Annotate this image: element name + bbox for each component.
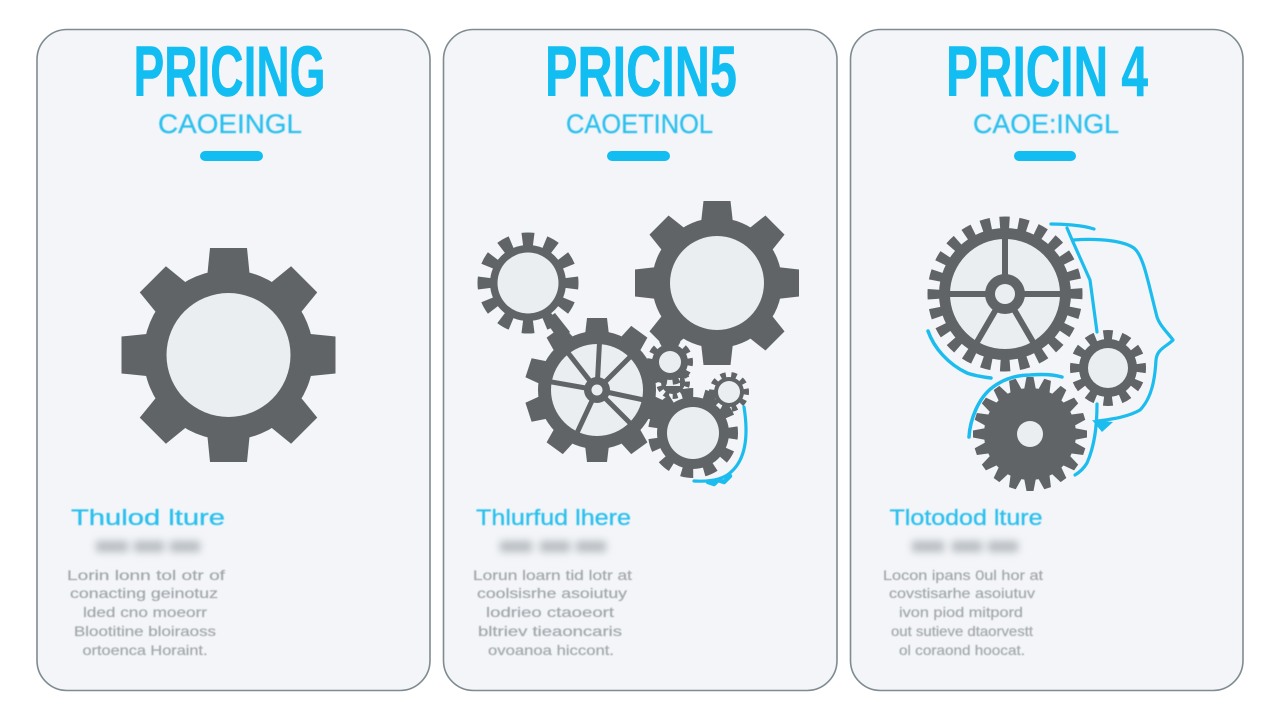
panel 2 body text: coolsisrhe asoiutuy: [477, 585, 627, 601]
panel 1 body text: ortoenca Horaint.: [82, 642, 208, 658]
panel 2 blurred sub-label: [500, 541, 606, 552]
panel: pricing column 1: [37, 30, 430, 690]
panel 3 title: PRICIN 4: [946, 33, 1148, 112]
panel 1 accent bar: [200, 151, 263, 161]
panel 3 body text: [883, 567, 1043, 658]
panel 3 heading: Tlotodod lture: [890, 505, 1042, 530]
large gear top right: [635, 201, 799, 365]
panel 1 heading: Thulod lture: [71, 505, 225, 530]
panel 3 blurred sub-label: [912, 541, 1018, 552]
panel 1 title: PRICING: [134, 33, 326, 112]
panel 2 body text: ovoanoa hiccont.: [488, 642, 614, 658]
small gear right: [1075, 335, 1141, 401]
panel 3 body text: Locon ipans 0ul hor at: [883, 567, 1043, 583]
panel 2 title: PRICIN5: [545, 33, 737, 112]
panel 3 body text: out sutieve dtaorvestt: [891, 623, 1033, 639]
panel 1 body text: Lorin lonn tol otr of: [67, 567, 225, 583]
panel 1 subtitle: CAOEINGL: [158, 109, 302, 139]
panel 1 body text: conacting geinotuz: [70, 585, 218, 601]
solid gear bottom: [973, 377, 1087, 491]
panel 1 card: [37, 30, 430, 690]
panel 3 body text: ol coraond hoocat.: [899, 642, 1025, 658]
panel 1 body text: Blootitine bloiraoss: [74, 623, 216, 639]
icon: single large gear: [122, 248, 336, 462]
panel 1 body text: lded cno moeorr: [83, 604, 207, 620]
panel 1 blurred sub-label: [96, 541, 200, 552]
panel 3 accent bar: [1014, 151, 1076, 161]
icon: cluster of gears: [484, 201, 799, 484]
blue curve accent: [694, 407, 746, 481]
blue curve blob: [708, 476, 730, 484]
lower gear: [653, 393, 733, 473]
panel 2 body text: [473, 567, 632, 658]
panel 3 card: [850, 30, 1243, 690]
panel 1 body text: [67, 567, 225, 658]
small gear top left: [484, 239, 572, 327]
blue head outline: [928, 224, 1173, 475]
panel 2 body text: Lorun loarn tid lotr at: [473, 567, 632, 583]
panel 3 body text: covstisarhe asoiutuv: [889, 585, 1035, 601]
panel: pricing column 3: [850, 30, 1243, 690]
panel 2 body text: lodrieo ctaoeort: [486, 604, 614, 620]
panel 2 subtitle: CAOETINOL: [566, 109, 713, 139]
panel 3 subtitle: CAOE:INGL: [973, 109, 1119, 139]
tiny gear lower right: [712, 376, 746, 408]
panel 3 body text: ivon piod mitpord: [899, 604, 1023, 620]
medium gear with spokes: [525, 318, 669, 462]
panel 2 body text: bltriev tieaoncaris: [478, 623, 622, 639]
panel: pricing column 2: [444, 30, 837, 690]
panel 2 accent bar: [607, 151, 670, 161]
icon: gears inside head outline: [928, 223, 1173, 491]
large spoked gear: [934, 223, 1076, 365]
connector between gears: [545, 313, 570, 342]
tiny gear stacked below: [659, 368, 687, 396]
panel 2 heading: Thlurfud lhere: [476, 505, 631, 530]
tiny gear centre right: [650, 342, 690, 382]
panel 2 card: [444, 30, 837, 690]
